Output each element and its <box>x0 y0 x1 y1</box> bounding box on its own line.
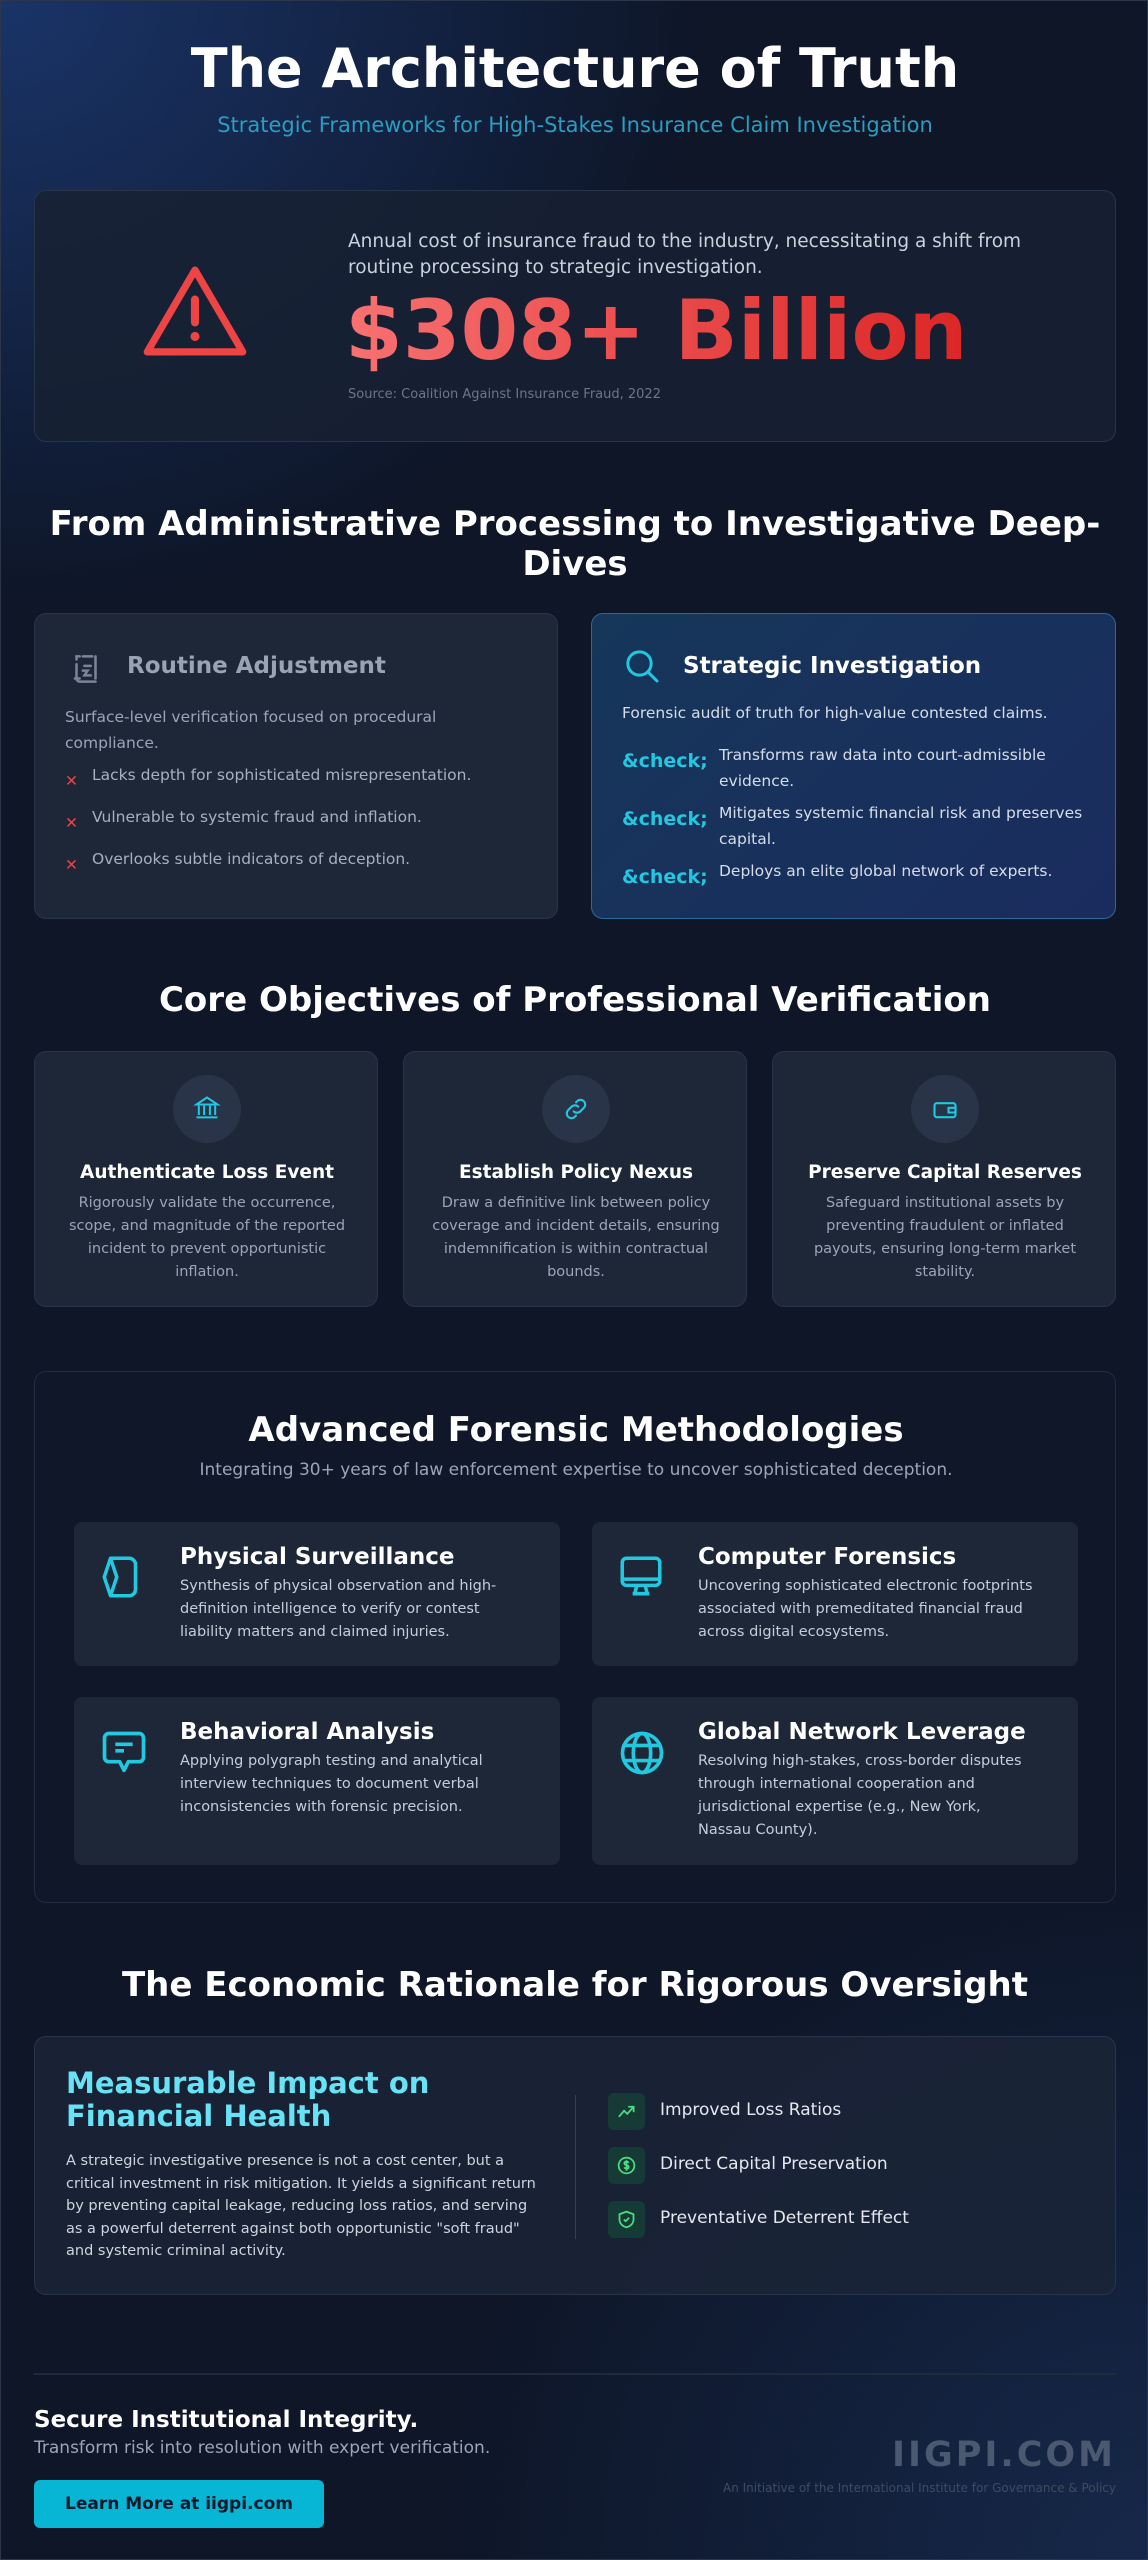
title: Preserve Capital Reserves <box>808 1162 1082 1183</box>
subtitle: Integrating 30+ years of law enforcement expertise to uncover sophisticated deception. <box>199 1460 952 1480</box>
description: Draw a definitive link between policy coverage and incident details, ensuring indemnification is within contractual bounds. <box>432 1195 720 1280</box>
icon: wallet <box>911 1075 979 1143</box>
check list: &check; <box>622 808 708 830</box>
item: deterrent <box>608 2201 909 2238</box>
bullet list: Vulnerable to systemic fraud and inflation. <box>92 808 422 826</box>
big number: $308+ Billion <box>345 282 968 379</box>
panel: policy nexus <box>403 1051 747 1307</box>
icon: chat bubble <box>102 1732 146 1772</box>
icon: link <box>542 1075 610 1143</box>
icon: magnifier <box>626 650 658 683</box>
title: Strategic Investigation <box>683 653 981 679</box>
icon: clipboard <box>74 655 97 683</box>
heading: Advanced Forensic Methodologies <box>248 1410 904 1450</box>
description: Surface-level verification focused on procedural compliance. <box>65 708 436 752</box>
title: Routine Adjustment <box>127 653 386 679</box>
icon: globe <box>620 1732 664 1774</box>
brand tagline: An Initiative of the International Institute for Governance & Policy <box>723 2481 1116 2495</box>
footer: brand <box>723 2435 1116 2495</box>
title: Computer Forensics <box>698 1544 956 1570</box>
bullet list: Overlooks subtle indicators of deception. <box>92 850 410 868</box>
card: behavioral analysis <box>74 1697 560 1865</box>
item: deterrent: Preventative Deterrent Effect <box>660 2208 909 2228</box>
stat description: Annual cost of insurance fraud to the industry, necessitating a shift from routine processing to strategic investigation. <box>348 231 1021 278</box>
card: physical surveillance <box>74 1522 560 1666</box>
brand name: IIGPI.COM <box>892 2435 1116 2475</box>
description: Forensic audit of truth for high-value contested claims. <box>622 704 1048 722</box>
benefit list <box>608 2093 909 2238</box>
bullet list: ✕ <box>65 814 78 832</box>
impact body: A strategic investigative presence is not a cost center, but a critical investment in risk mitigation. It yields a significant return by preventing capital leakage, reducing loss ratios, and serving as a powerful deterrent against both opportunistic "soft fraud" and systemic criminal activity. <box>66 2153 536 2259</box>
icon: bank <box>173 1075 241 1143</box>
icon: warning <box>144 266 246 356</box>
check list: Mitigates systemic financial risk and preserves capital. <box>719 804 1082 848</box>
description: Safeguard institutional assets by preventing fraudulent or inflated payouts, ensuring long-term market stability. <box>814 1195 1076 1280</box>
title: Global Network Leverage <box>698 1719 1026 1745</box>
description: Resolving high-stakes, cross-border disputes through international cooperation and jurisdictional expertise (e.g., New York, Nassau County). <box>698 1753 1022 1838</box>
item: capital <box>608 2147 888 2184</box>
source: Source: Coalition Against Insurance Fraud, 2022 <box>348 387 661 402</box>
subtitle: Strategic Frameworks for High-Stakes Insurance Claim Investigation <box>217 113 933 137</box>
title: Establish Policy Nexus <box>459 1162 693 1183</box>
panel: capital reserves <box>772 1051 1116 1307</box>
bullet list: Lacks depth for sophisticated misrepresentation. <box>92 766 471 784</box>
footer: call to action <box>34 2407 490 2528</box>
check list: &check; <box>622 750 708 772</box>
button <box>34 2480 324 2528</box>
item: loss ratios: Improved Loss Ratios <box>660 2100 841 2120</box>
title: Behavioral Analysis <box>180 1719 434 1745</box>
footer heading: Secure Institutional Integrity. <box>34 2407 418 2433</box>
card: computer forensics <box>592 1522 1078 1666</box>
panel: hero stat <box>34 190 1116 442</box>
check list: Deploys an elite global network of experts. <box>719 862 1052 880</box>
heading: economic rationale: The Economic Rationale for Rigorous Oversight <box>122 1965 1028 2005</box>
panel: strategic investigation <box>591 613 1116 919</box>
heading: core objectives: Core Objectives of Professional Verification <box>159 980 991 1020</box>
bullet list <box>65 766 471 874</box>
panel: forensic methodologies <box>34 1371 1116 1903</box>
panel: economic impact <box>34 2036 1116 2295</box>
panel: authenticate loss <box>34 1051 378 1307</box>
title: Physical Surveillance <box>180 1544 454 1570</box>
footer subtitle: Transform risk into resolution with expert verification. <box>34 2438 490 2458</box>
description: Rigorously validate the occurrence, scope, and magnitude of the reported incident to prevent opportunistic inflation. <box>69 1195 345 1280</box>
panel: routine adjustment <box>34 613 558 919</box>
description: Uncovering sophisticated electronic footprints associated with premeditated financial fraud across digital ecosystems. <box>698 1578 1033 1640</box>
heading: processing vs investigation: From Administrative Processing to Investigative Deep-Dives <box>50 504 1100 584</box>
card: global network <box>592 1697 1078 1865</box>
description: Synthesis of physical observation and high-definition intelligence to verify or contest liability matters and claimed injuries. <box>180 1578 496 1640</box>
title: Authenticate Loss Event <box>80 1162 334 1183</box>
check list <box>622 746 1082 888</box>
item: loss ratios <box>608 2093 841 2130</box>
description: Applying polygraph testing and analytical interview techniques to document verbal inconsistencies with forensic precision. <box>180 1753 483 1815</box>
bullet list: ✕ <box>65 772 78 790</box>
check list: &check; <box>622 866 708 888</box>
button: Learn More at iigpi.com <box>65 2494 293 2514</box>
bullet list: ✕ <box>65 856 78 874</box>
check list: Transforms raw data into court-admissible evidence. <box>719 746 1046 790</box>
icon: monitor <box>620 1556 662 1596</box>
icon: surveillance <box>102 1556 138 1598</box>
impact heading: Measurable Impact on Financial Health <box>66 2066 429 2133</box>
item: capital: Direct Capital Preservation <box>660 2154 888 2174</box>
title: The Architecture of Truth <box>191 37 959 100</box>
